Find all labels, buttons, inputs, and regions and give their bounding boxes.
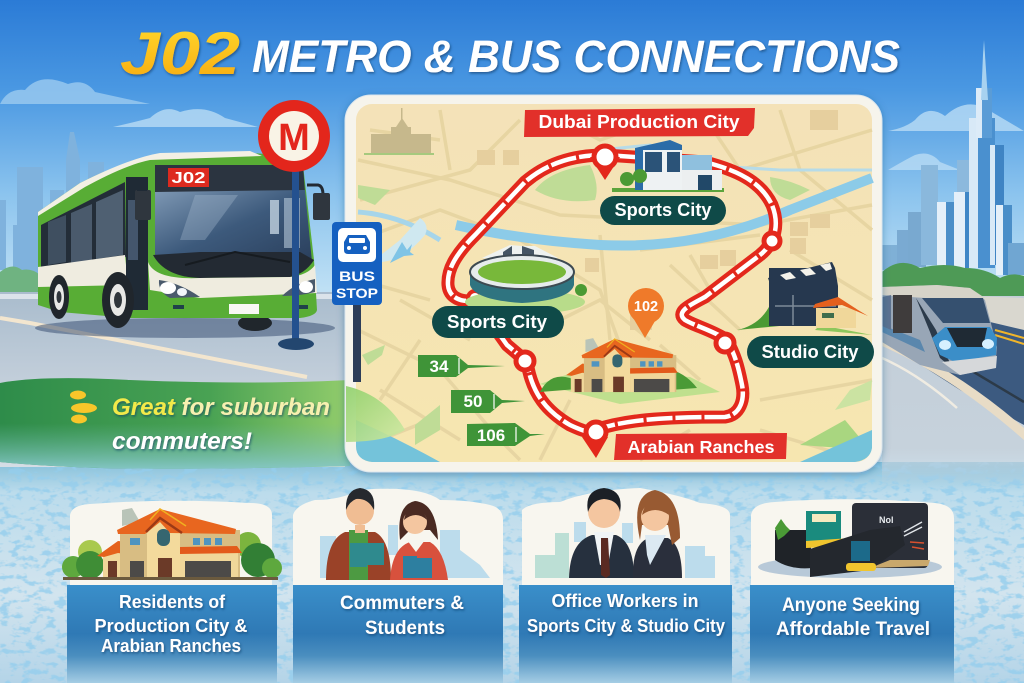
card text: Anyone Seeking [782,595,920,616]
bus tag 106 [467,423,545,446]
pin 102 [628,288,664,338]
card text: Sports City & Studio City [527,616,725,636]
river [456,178,872,246]
card text [776,595,930,640]
callout text [112,394,330,455]
card illustration: house [62,501,282,585]
icon: office building [612,140,724,192]
trees left [0,266,40,295]
card: commuters and students [293,488,503,683]
icon: metro stop sign: M [278,117,310,159]
card: affordable travel [750,499,954,683]
label: Dubai Production City [524,108,755,137]
sky background [0,0,1024,300]
card: office workers [519,488,732,683]
label: Studio City [747,336,874,368]
route stop: south-west [516,352,534,370]
route line [448,155,776,432]
label: Sports City top [600,196,726,225]
panel: route map [345,95,882,472]
card illustration: office workers [522,488,730,585]
map parks [358,165,872,450]
card illustration: wallet and Nol card [751,499,954,585]
label: Sports City top: Sports City [614,200,712,220]
card panel [67,585,277,683]
bus [35,151,335,338]
icon: clapperboard [737,262,872,335]
icon: landmark building [364,108,434,155]
card illustration: students [293,488,503,585]
label: Arabian Ranches: Arabian Ranches [628,437,775,457]
card text: Students [365,618,445,639]
card text [94,592,248,656]
right road and rail [882,296,1024,486]
card text: Office Workers in [552,591,698,611]
title [120,20,900,87]
clouds [0,79,1024,170]
title: METRO & BUS CONNECTIONS [252,31,900,82]
coast water corners [356,420,440,462]
callout text: Great for suburban [112,394,330,421]
card panel [293,585,503,683]
card text [527,591,725,636]
card text [340,593,464,639]
icon: metro stop sign [258,100,330,350]
bus tag 34: 34 [430,357,449,376]
left skyline [0,132,104,282]
route number sign J02 [168,168,209,187]
route stop: south-east [716,334,734,352]
icon: metro train [882,285,997,375]
trees right [882,263,1024,297]
card text: Commuters & [340,593,464,614]
map blocks [477,110,838,330]
label: Sports City left [432,306,564,338]
callout text: commuters! [112,428,252,455]
icon: airplane [390,242,414,263]
bus tag 50 [451,390,525,413]
label: Arabian Ranches [614,433,787,460]
card illustration: wallet and Nol card: Nol [879,515,894,525]
bus tag 34 [418,355,505,377]
route number sign J02: J02 [172,170,206,187]
card text: Affordable Travel [776,619,930,640]
icon: stadium [465,245,587,314]
bus tag 106: 106 [477,426,505,445]
card text: Arabian Ranches [101,636,241,656]
card text: Residents of [119,592,226,612]
pin 102: 102 [634,299,658,315]
route stop: east [764,233,780,249]
icon: villa [540,338,720,404]
icon: bus stop sign [332,222,382,382]
card panel [750,585,954,683]
label: Dubai Production City: Dubai Production City [538,112,740,132]
label: Sports City left: Sports City [447,312,547,332]
callout banner: Great for suburban commuters [0,378,350,469]
left road [0,292,345,467]
bus tag 50: 50 [464,392,482,411]
route stop: south pin [582,422,608,458]
right skyline [882,40,1024,275]
card panel [519,585,732,683]
icon: yellow blobs [70,390,97,424]
card: residents [62,501,282,683]
icon: bus stop sign: STOP [336,285,378,301]
icon: bus stop sign: BUS [339,268,375,284]
title: J02 [120,20,240,87]
banner leaf tail over the map [346,386,405,442]
label: Studio City: Studio City [762,342,858,362]
route stop: top [590,146,620,180]
bottom textured ground [0,462,1024,683]
map streets [358,110,872,460]
route stop: west [468,291,482,305]
card text: Production City & [94,616,248,636]
